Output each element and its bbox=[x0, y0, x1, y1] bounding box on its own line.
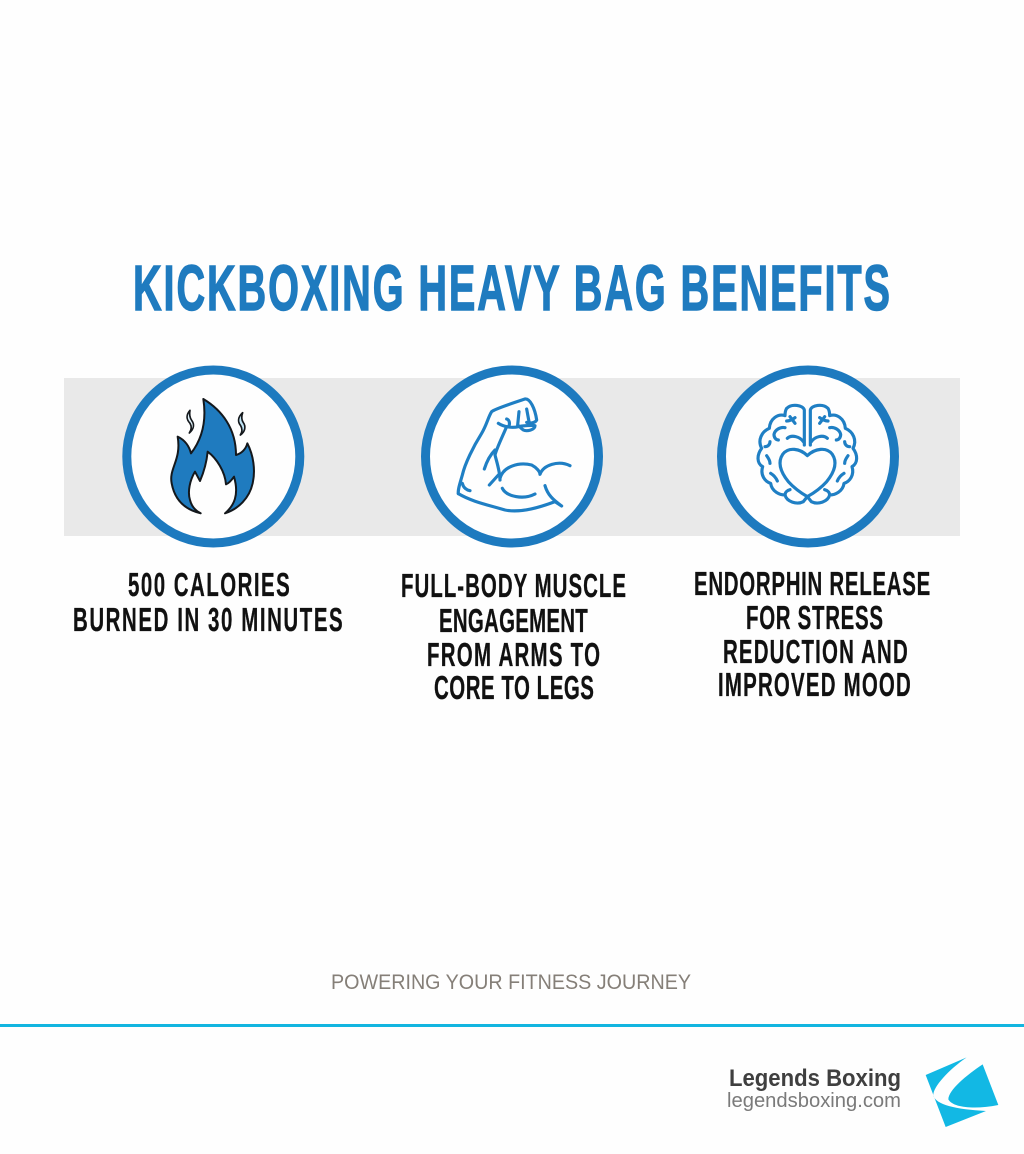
text block: endorphin release: ENDORPHIN RELEASE bbox=[694, 565, 930, 602]
text block: endorphin release: IMPROVED MOOD bbox=[718, 666, 911, 703]
text block: muscle engagement: FULL-BODY MUSCLE bbox=[401, 567, 626, 604]
footer divider line bbox=[0, 1024, 1024, 1027]
text block: calories: BURNED IN 30 MINUTES bbox=[73, 601, 343, 638]
tagline: POWERING YOUR FITNESS JOURNEY bbox=[331, 971, 691, 994]
text block: calories: 500 CALORIES bbox=[128, 566, 290, 603]
panel: grey band behind icons bbox=[64, 378, 960, 536]
text block: endorphin release: REDUCTION AND bbox=[723, 633, 908, 670]
text block: muscle engagement: ENGAGEMENT bbox=[439, 602, 588, 639]
text block: muscle engagement: FROM ARMS TO bbox=[427, 636, 600, 673]
text block: endorphin release: FOR STRESS bbox=[746, 599, 883, 636]
icon: brain with heart in circle bbox=[722, 370, 894, 543]
icon: flame in circle bbox=[127, 370, 300, 543]
icon: brand logo bbox=[926, 1057, 998, 1127]
brand url: legendsboxing.com bbox=[727, 1089, 901, 1112]
text block: muscle engagement: CORE TO LEGS bbox=[434, 669, 594, 706]
icon: flexed arm in circle bbox=[426, 370, 598, 543]
title: KICKBOXING HEAVY BAG BENEFITS bbox=[133, 254, 890, 324]
text block: calories bbox=[73, 566, 343, 638]
brand name: Legends Boxing bbox=[729, 1065, 901, 1092]
text block: muscle engagement bbox=[401, 567, 626, 706]
text block: endorphin release bbox=[694, 565, 930, 703]
